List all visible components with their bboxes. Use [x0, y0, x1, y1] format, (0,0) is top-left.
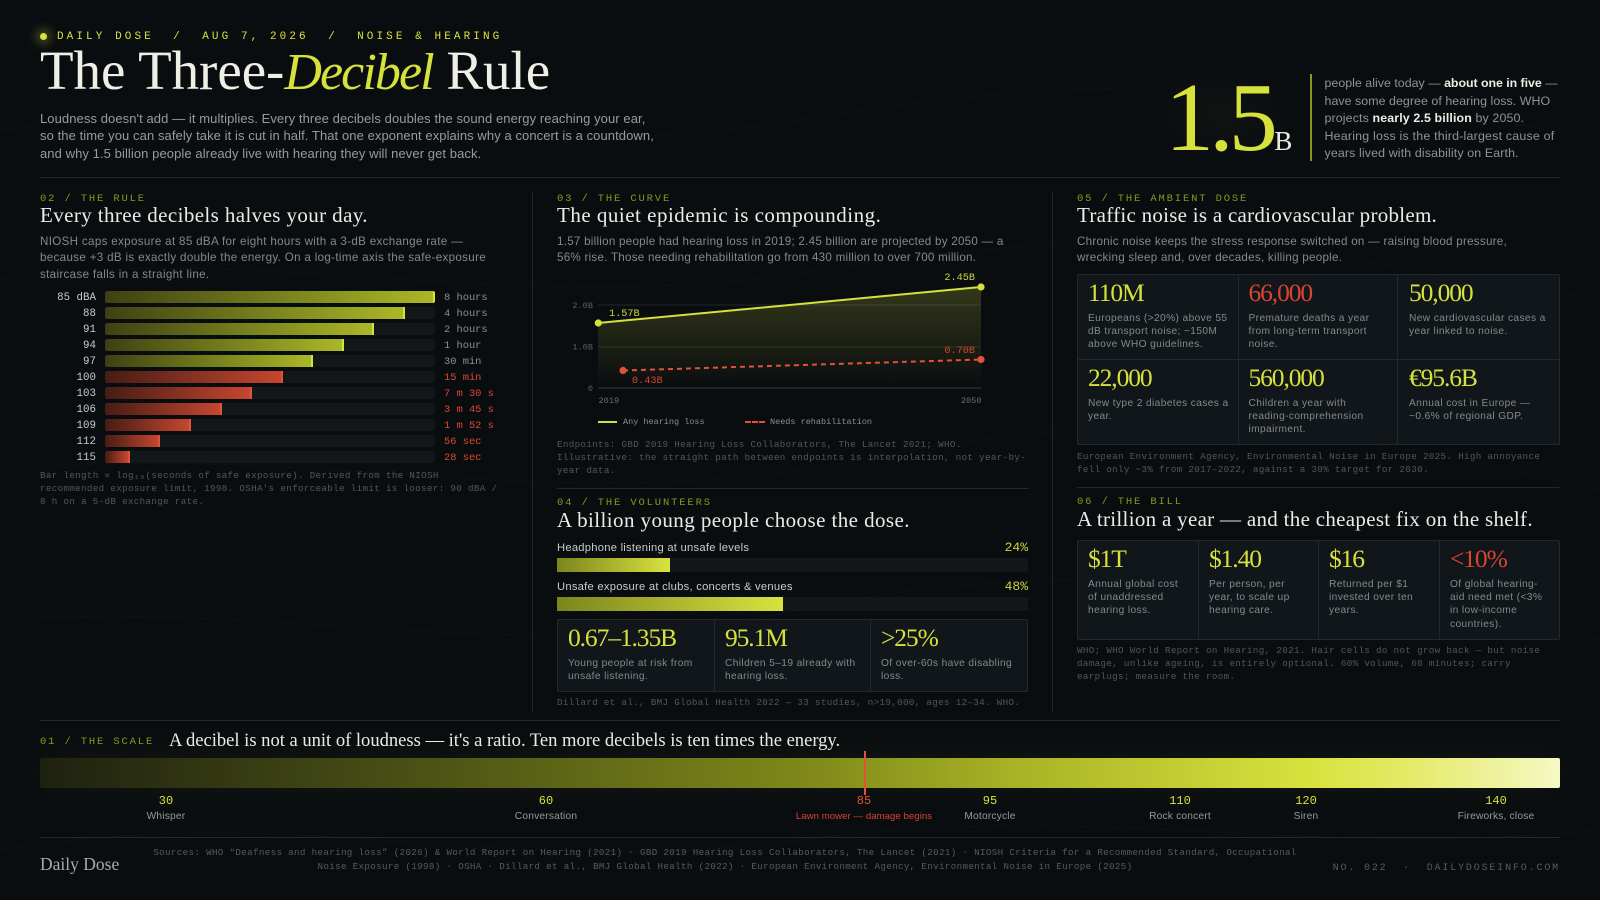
tick: 140 — [1458, 794, 1534, 822]
bar: headphone listening: Headphone listening at unsafe levels — [557, 542, 749, 554]
panel: 06 the bill — [1077, 496, 1560, 682]
source note: earplugs; measure the room. — [1077, 671, 1235, 682]
hero number: 1.5B — [1165, 64, 1292, 172]
chart note: 8 h on a 5-dB exchange rate. — [40, 496, 204, 507]
panel: 02 the rule — [40, 192, 497, 507]
heading: A billion young people choose the dose. — [557, 508, 910, 532]
stat: Europeans exposed: above WHO guidelines. — [1088, 339, 1203, 350]
stat: annual cost — [1077, 540, 1199, 640]
tick: 60: Conversation — [515, 810, 577, 822]
chart note: recommended exposure limit, 1998. OSHA's enforceable limit is looser: 90 dBA / — [40, 483, 497, 494]
stat: per person: Per person, per — [1209, 579, 1285, 590]
bar chart: safe exposure by decibel level: 8 hours — [444, 292, 488, 304]
bar chart: safe exposure by decibel level: 91 — [83, 324, 96, 336]
panel: 01 the scale — [40, 730, 1560, 822]
stat: Europeans exposed: dB transport noise; ~150M — [1088, 326, 1217, 337]
stat: cardiovascular cases: 50,000 — [1409, 278, 1473, 306]
stat: return: invested over ten — [1329, 592, 1413, 603]
bar chart: safe exposure by decibel level: 3 m 45 s — [444, 404, 494, 416]
bar chart: safe exposure by decibel level: 106 — [77, 404, 96, 416]
stat: young people at risk: unsafe listening. — [568, 671, 648, 682]
panel: 05 the ambient dose — [1077, 192, 1560, 475]
stat: diabetes: year. — [1088, 411, 1112, 422]
section label: 01 / THE SCALE — [40, 736, 154, 748]
body text — [557, 235, 1004, 264]
tick: 85: 85 — [857, 794, 871, 808]
bar chart: safe exposure by decibel level: 28 sec — [444, 452, 481, 464]
panel: 03 the curve — [557, 192, 1026, 476]
stat: per person: $1.40 — [1209, 544, 1261, 572]
tick: 95: 95 — [983, 794, 997, 808]
stat: diabetes: 22,000 — [1088, 362, 1152, 392]
heading: Every three decibels halves your day. — [40, 203, 368, 227]
stat: return — [1318, 540, 1440, 640]
line chart: hearing loss projection: 0.70B — [944, 346, 975, 357]
bar chart: safe exposure by decibel level: 103 — [77, 388, 96, 400]
bar: headphone listening — [557, 540, 1028, 572]
stat: over-60s: >25% — [881, 622, 938, 652]
stat cards — [1077, 540, 1560, 640]
bar chart: safe exposure by decibel level: 112 — [77, 436, 96, 448]
bar chart: safe exposure by decibel level: 1 m 52 s — [444, 420, 494, 432]
intro text — [40, 110, 654, 160]
stat: per person — [1198, 540, 1318, 640]
section label: 04 / THE VOLUNTEERS — [557, 496, 712, 508]
stat: need met — [1450, 544, 1542, 630]
footer — [40, 847, 1560, 874]
legend — [598, 417, 872, 427]
source note: European Environment Agency, Environmental Noise in Europe 2025. High annoyance — [1077, 451, 1540, 462]
stat: young people at risk: 0.67–1.35B — [568, 622, 676, 652]
section label: 02 / THE RULE — [40, 192, 146, 204]
stat: need met: Of global hearing- — [1450, 579, 1538, 590]
bar chart: safe exposure by decibel level: 15 min — [444, 372, 481, 384]
stat: over-60s: Of over-60s have disabling — [881, 658, 1012, 669]
sources: Sources: WHO “Deafness and hearing loss” (2026) & World Report on Hearing (2021) · GBD 2019 Hearing Loss Collaborators, The Lancet (2021) · NIOSH Criteria for a Recommended Standard, Occupational — [153, 847, 1297, 858]
source note: damage, unlike ageing, is entirely optional. 60% volume, 60 minutes; carry — [1077, 658, 1511, 669]
stat cards — [557, 619, 1028, 692]
tick: 85 — [796, 794, 932, 822]
stat: diabetes — [1077, 359, 1238, 445]
bar chart: safe exposure by decibel level: 85 dBA — [57, 292, 96, 304]
stat: premature deaths: noise. — [1248, 339, 1278, 350]
chart note: Bar length ∝ log₁₀(seconds of safe exposure). Derived from the NIOSH — [40, 470, 439, 480]
tick: 120: Siren — [1294, 810, 1318, 822]
stat: return: years. — [1329, 605, 1359, 616]
hero description: projects nearly 2.5 billion by 2050. — [1324, 111, 1524, 125]
line chart: hearing loss projection — [572, 273, 985, 394]
intro text: Loudness doesn't add — it multiplies. Every three decibels doubles the sound energy reaching your ear, — [40, 110, 645, 126]
hero description: have some degree of hearing loss. WHO — [1324, 94, 1550, 108]
chart note — [557, 438, 1026, 476]
stat: Europeans exposed: Europeans (>20%) above 55 — [1088, 313, 1227, 324]
stat: premature deaths — [1238, 274, 1398, 360]
hero description — [1324, 76, 1558, 160]
stat: annual cost: Annual cost in Europe — — [1409, 398, 1530, 409]
stat: annual cost: ~0.6% of regional GDP. — [1409, 411, 1523, 422]
chart note: year data. — [557, 465, 616, 476]
title: The Three-Decibel Rule — [40, 40, 550, 101]
body text: NIOSH caps exposure at 85 dBA for eight hours with a 3-dB exchange rate — — [40, 235, 463, 248]
line chart: hearing loss projection: 2.0B — [572, 301, 593, 311]
edition and site: NO. 022 · DAILYDOSEINFO.COM — [1333, 863, 1560, 874]
stat: per person: hearing care. — [1209, 605, 1273, 616]
line chart: hearing loss projection: 2.45B — [944, 273, 975, 284]
stat: per person: year, to scale up — [1209, 592, 1290, 603]
bar chart: safe exposure by decibel level: 94 — [83, 340, 96, 352]
source note: fell only ~3% from 2017–2022, against a 30% target for 2030. — [1077, 464, 1429, 475]
hero stat: 1.5 billion — [1160, 70, 1560, 165]
bar chart: safe exposure by decibel level: 1 hour — [444, 340, 481, 352]
tick: 110 — [1149, 794, 1211, 822]
tick: 30 — [146, 794, 185, 822]
body text: Chronic noise keeps the stress response switched on — raising blood pressure, — [1077, 235, 1507, 248]
stat: children reading — [1238, 359, 1398, 445]
tick: 120: 120 — [1295, 794, 1317, 808]
x axis labels: 2050 — [961, 396, 982, 406]
tick: 110: Rock concert — [1149, 810, 1211, 822]
section label: 03 / THE CURVE — [557, 192, 671, 204]
stat: premature deaths: 66,000 — [1248, 278, 1312, 306]
section label: 05 / THE AMBIENT DOSE — [1077, 192, 1248, 204]
chart note: Endpoints: GBD 2019 Hearing Loss Collaborators, The Lancet 2021; WHO. — [557, 438, 962, 450]
stat: need met: in low-income — [1450, 605, 1517, 616]
stat: need met: <10% — [1450, 544, 1507, 572]
stat: annual cost: $1T — [1088, 544, 1126, 572]
stat: cardiovascular cases: year linked to noise. — [1409, 326, 1508, 337]
stat: children — [714, 619, 870, 692]
intro text: so the time you can safely take it is cut in half. That one exponent explains why a concert is a countdown, — [40, 128, 654, 143]
source note — [1077, 451, 1540, 475]
chart note: Illustrative: the straight path between endpoints is interpolation, not year-by- — [557, 452, 1026, 463]
header: eyebrow, title and intro — [32, 25, 654, 160]
tick: 95 — [964, 794, 1016, 822]
bar chart: safe exposure by decibel level: 56 sec — [444, 436, 481, 448]
stat: children: 95.1M — [725, 622, 787, 652]
body text: because +3 dB is exactly double the energy. On a log-time axis the safe-exposure — [40, 251, 486, 264]
eyebrow: DAILY DOSE / AUG 7, 2026 / NOISE & HEARING — [57, 31, 502, 43]
source note: WHO; WHO World Report on Hearing, 2021. Hair cells do not grow back — but noise — [1077, 645, 1540, 656]
line chart: hearing loss projection: 1.0B — [572, 342, 593, 352]
accent bar — [1310, 74, 1312, 161]
body text — [40, 235, 486, 281]
line chart: hearing loss projection: 1.57B — [609, 309, 640, 320]
line chart: hearing loss projection: 0.43B — [632, 376, 663, 387]
stat: Europeans exposed — [1077, 274, 1238, 360]
stat: children reading: 560,000 — [1248, 362, 1324, 392]
stat: annual cost: €95.6B — [1409, 362, 1477, 392]
sources — [153, 847, 1297, 872]
stat: need met: countries). — [1450, 619, 1502, 630]
stat: children reading: reading-comprehension — [1248, 411, 1364, 422]
bar chart: safe exposure by decibel level: 4 hours — [444, 308, 488, 320]
tick: 95: Motorcycle — [964, 810, 1016, 822]
stat: premature deaths: from long-term transport — [1248, 326, 1367, 337]
tick: 120 — [1294, 794, 1318, 822]
tick: 140: 140 — [1485, 794, 1507, 808]
bar: clubs and concerts — [557, 579, 1028, 611]
icon: glowing status dot — [40, 33, 47, 40]
legend: Needs rehabilitation — [770, 417, 872, 427]
tick: 85: Lawn mower — damage begins — [796, 810, 932, 822]
stat: children: Children 5–19 already with — [725, 658, 856, 669]
chart note — [40, 470, 497, 507]
body text: 56% rise. Those needing rehabilitation go from 430 million to over 700 million. — [557, 251, 976, 264]
body text: wrecking sleep and, over decades, killing people. — [1077, 251, 1342, 264]
body text: staircase falls in a straight line. — [40, 268, 209, 281]
stat: annual cost: of unaddressed — [1088, 592, 1164, 603]
stat: children: hearing loss. — [725, 671, 788, 682]
x axis labels — [598, 396, 982, 406]
stat: premature deaths: Premature deaths a year — [1248, 313, 1369, 324]
stat: Europeans exposed: 110M — [1088, 278, 1144, 306]
bar: headphone listening: 24% — [1005, 540, 1028, 555]
bar chart: safe exposure by decibel level — [57, 291, 494, 464]
stat: young people at risk — [557, 619, 714, 692]
bar chart: safe exposure by decibel level: 88 — [83, 308, 96, 320]
bar chart: safe exposure by decibel level: 97 — [83, 356, 96, 368]
stat: annual cost: hearing loss. — [1088, 605, 1151, 616]
hero description: Hearing loss is the third-largest cause of — [1324, 128, 1554, 142]
stat: need met: aid need met (<3% — [1450, 592, 1542, 603]
stat: children reading: Children a year with — [1248, 398, 1346, 409]
stat grid — [1077, 274, 1560, 445]
body text — [1077, 235, 1507, 264]
tick: 30: Whisper — [147, 810, 185, 822]
stat: cardiovascular cases — [1398, 274, 1560, 360]
heading: Traffic noise is a cardiovascular problem. — [1077, 203, 1437, 227]
source note: Dillard et al., BMJ Global Health 2022 — 33 studies, n>19,000, ages 12–34. WHO. — [557, 697, 1020, 708]
decibel gradient bar — [40, 758, 1560, 788]
section label: 06 / THE BILL — [1077, 496, 1183, 508]
hero description: years lived with disability on Earth. — [1324, 146, 1519, 160]
heading: A trillion a year — and the cheapest fix on the shelf. — [1077, 507, 1533, 531]
wordmark: Daily Dose — [40, 854, 119, 874]
bar: clubs and concerts: 48% — [1005, 579, 1028, 594]
stat: cardiovascular cases: New cardiovascular cases a — [1409, 313, 1546, 324]
heading: The quiet epidemic is compounding. — [557, 203, 881, 227]
bar chart: safe exposure by decibel level: 2 hours — [444, 324, 488, 336]
heading: A decibel is not a unit of loudness — it's a ratio. Ten more decibels is ten times the energy. — [169, 730, 840, 751]
sources: Noise Exposure (1998) · OSHA · Dillard et al., BMJ Global Health (2022) · European Environment Agency, Environmental Noise in Europe (2025) — [317, 861, 1132, 872]
tick: 60 — [515, 794, 577, 822]
source note — [1077, 645, 1540, 682]
stat: over-60s — [881, 622, 1012, 682]
bar chart: safe exposure by decibel level: 100 — [77, 372, 96, 384]
stat: young people at risk: Young people at risk from — [568, 658, 693, 669]
hero description: people alive today — about one in five — — [1324, 76, 1558, 90]
legend: Any hearing loss — [623, 417, 705, 427]
tick: 60: 60 — [539, 794, 553, 808]
bar chart: safe exposure by decibel level: 109 — [77, 420, 96, 432]
intro text: and why 1.5 billion people already live with hearing they will never get back. — [40, 146, 481, 160]
stat: annual cost — [1409, 362, 1530, 422]
stat: return: $16 — [1329, 544, 1364, 572]
marker: damage threshold — [864, 751, 866, 795]
stat: children reading: impairment. — [1248, 424, 1306, 435]
tick: 110: 110 — [1169, 794, 1191, 808]
bar chart: safe exposure by decibel level: 7 m 30 s — [444, 388, 494, 400]
line chart: hearing loss projection: 0 — [588, 384, 593, 394]
bar chart: safe exposure by decibel level: 115 — [77, 452, 96, 464]
stat: diabetes: New type 2 diabetes cases a — [1088, 398, 1229, 409]
bar: clubs and concerts: Unsafe exposure at clubs, concerts & venues — [557, 581, 793, 593]
stat: over-60s: loss. — [881, 671, 904, 682]
body text: 1.57 billion people had hearing loss in 2019; 2.45 billion are projected by 2050 — a — [557, 235, 1004, 248]
stat: annual cost: Annual global cost — [1088, 579, 1178, 590]
stat: return: Returned per $1 — [1329, 579, 1408, 590]
tick: 140: Fireworks, close — [1458, 810, 1534, 822]
bar chart: safe exposure by decibel level: 30 min — [444, 356, 481, 368]
tick: 30: 30 — [159, 794, 173, 808]
panel: 04 the volunteers — [557, 496, 1028, 708]
x axis labels: 2019 — [598, 396, 619, 406]
